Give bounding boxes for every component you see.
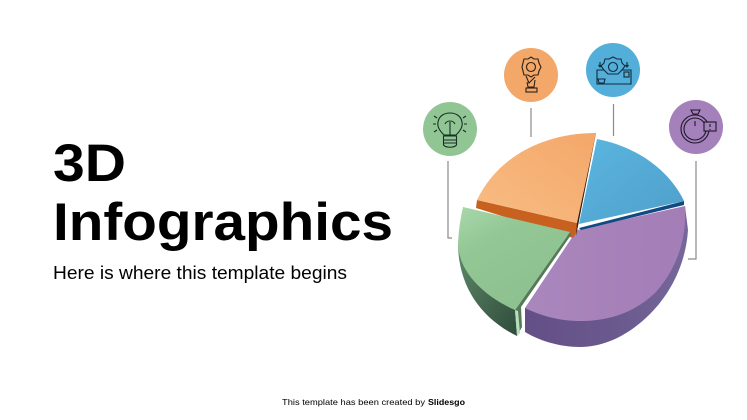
slice: purple [525, 206, 688, 347]
icon: stopwatch [669, 100, 723, 154]
slice: green [458, 207, 571, 336]
icon: camera with gear [586, 43, 640, 97]
3D pie chart [458, 133, 688, 347]
title [53, 134, 393, 252]
subtitle: Here is where this template begins [53, 263, 347, 283]
icon: light bulb [423, 102, 477, 156]
connector lines [448, 104, 696, 259]
footer credit: This template has been created by [282, 397, 426, 407]
slice: orange [476, 133, 596, 238]
footer credit: Slidesgo [428, 397, 465, 407]
icon: gear in hand [504, 48, 558, 102]
title: 3D [53, 134, 126, 193]
title: Infographics [53, 193, 393, 252]
slice: blue [579, 139, 684, 230]
